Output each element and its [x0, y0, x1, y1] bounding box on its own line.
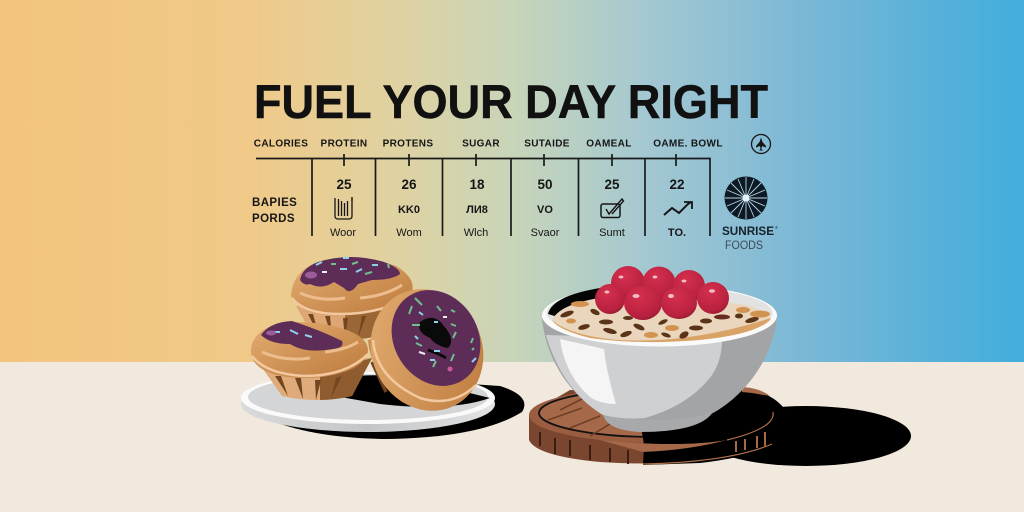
bowl rim [542, 284, 777, 346]
bottom row labels: Sumt [599, 227, 625, 239]
value row [336, 177, 685, 192]
value row: 18 [469, 177, 485, 192]
cherries [595, 266, 729, 320]
column headers: CALORIES [254, 138, 308, 150]
second row codes: ЛИ8 [466, 204, 488, 216]
column headers [254, 138, 723, 150]
bowl body [542, 318, 777, 432]
icon: checklist and pen [601, 199, 624, 218]
value row: 25 [336, 177, 352, 192]
icon: trend arrow [664, 202, 692, 215]
bottom row labels: Wlch [464, 227, 488, 239]
second row codes: VO [537, 204, 553, 216]
column headers: OAMEAL [586, 138, 632, 150]
column headers: PROTEIN [321, 138, 367, 150]
top muffin [291, 257, 413, 340]
plate [241, 372, 495, 432]
oatmeal bowl [542, 266, 777, 432]
long bowl shadow [701, 406, 911, 466]
value row: 26 [401, 177, 417, 192]
bottom row labels [330, 227, 686, 239]
plate with muffins [241, 257, 524, 439]
second row codes [398, 204, 553, 216]
logo sunburst [724, 176, 768, 220]
row label: BAPIES [252, 197, 297, 209]
value row: 50 [537, 177, 553, 192]
column headers: SUGAR [462, 138, 500, 150]
bottom row labels: Svaor [531, 227, 560, 239]
column headers: OAME. BOWL [653, 138, 723, 150]
row label: PORDS [252, 213, 295, 225]
background sky gradient [0, 0, 1024, 362]
logo wordmark: SUNRISE [722, 224, 774, 238]
donut [351, 271, 503, 429]
plate shadow [253, 382, 524, 439]
nutrition table [252, 138, 723, 239]
title: FUEL YOUR DAY RIGHT [254, 75, 768, 128]
oatmeal [552, 298, 771, 342]
bottom row labels: Wom [396, 227, 422, 239]
row label [252, 197, 297, 225]
second row codes: KK0 [398, 204, 420, 216]
column headers: PROTENS [383, 138, 433, 150]
wooden coaster [529, 385, 790, 465]
value row: 25 [604, 177, 620, 192]
icon: bar glass [335, 197, 352, 219]
left muffin [251, 321, 372, 400]
table grid lines [256, 154, 710, 236]
icon: plane in circle [752, 134, 770, 154]
logo subline: FOODS [725, 240, 763, 252]
bottom row labels: TO. [668, 227, 686, 239]
column headers: SUTAIDE [524, 138, 570, 150]
bottom row labels: Woor [330, 227, 356, 239]
logo: Sunrise Foods [722, 176, 778, 252]
table surface [0, 362, 1024, 512]
value row: 22 [669, 177, 685, 192]
logo: Sunrise Foods: ® [775, 225, 778, 230]
